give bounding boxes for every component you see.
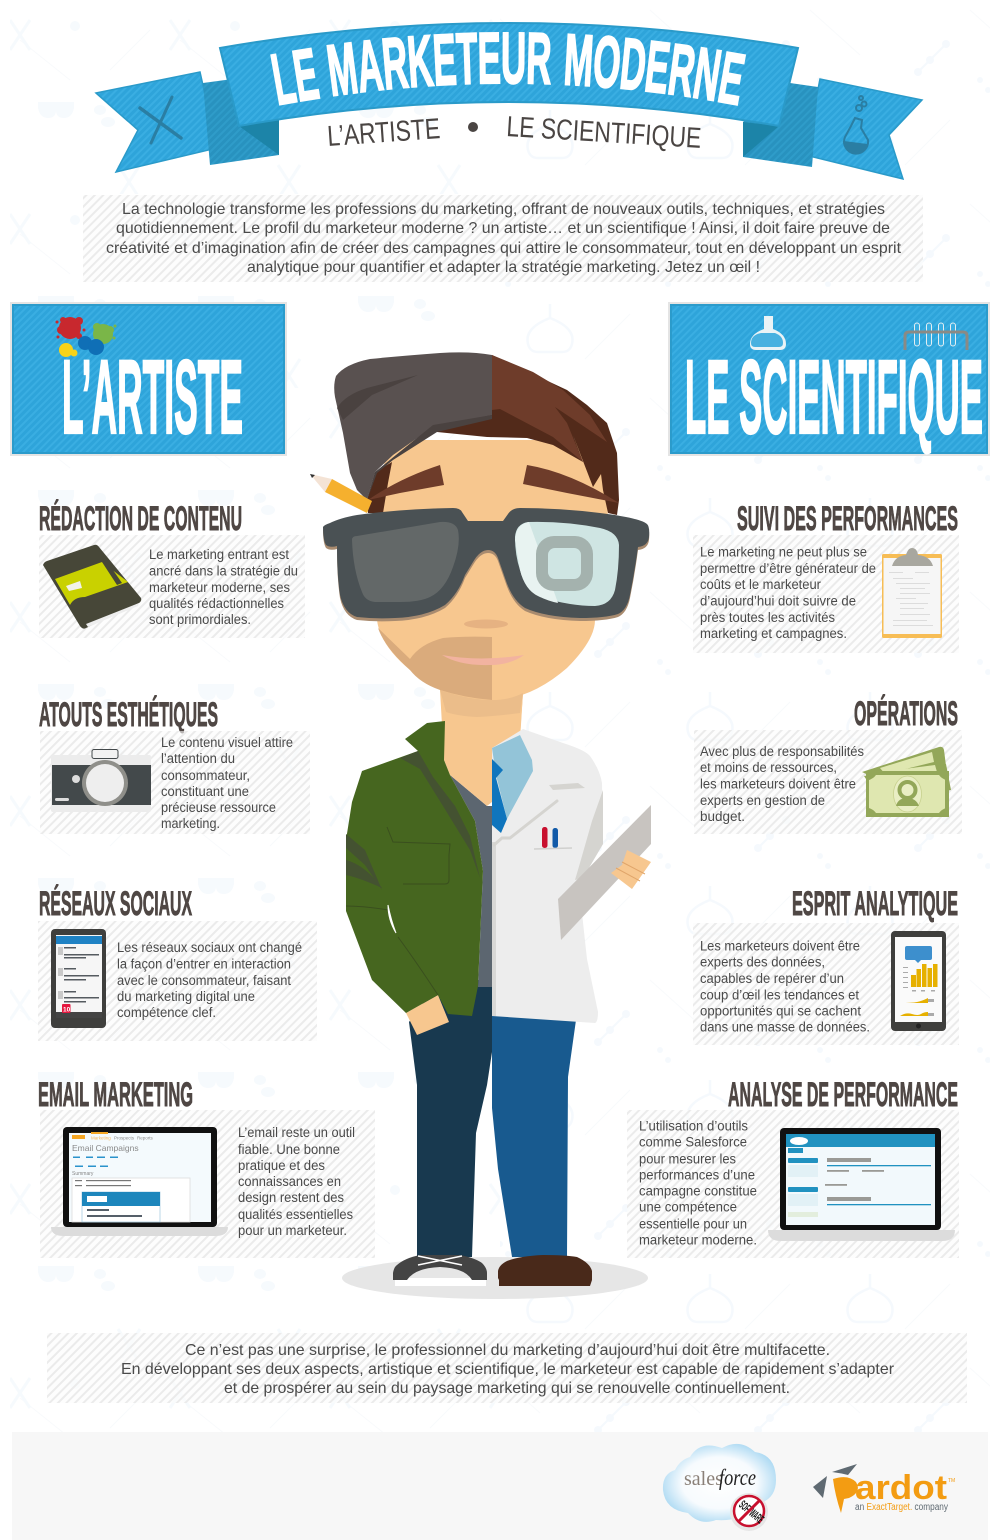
text: L’utilisation d’outils bbox=[639, 1118, 748, 1134]
text bbox=[149, 547, 298, 627]
pens in pocket bbox=[542, 827, 548, 848]
text: campagne constitue bbox=[639, 1184, 757, 1198]
text: l’attention du bbox=[161, 751, 235, 766]
text: marketeur moderne. bbox=[639, 1232, 757, 1248]
text bbox=[161, 735, 293, 831]
panel: intro: créativité et d’imagination afin de créer des campagnes qui attire le consommateur, tout en développant un esprit bbox=[106, 240, 902, 257]
title: E bbox=[641, 26, 674, 110]
panel: conclusion: et de prospérer au sein du paysage marketing qui se renouvelle continuellement. bbox=[224, 1380, 790, 1397]
ribbon main arc bbox=[220, 23, 798, 126]
text bbox=[700, 744, 864, 824]
text bbox=[700, 544, 876, 641]
panel: intro bbox=[83, 195, 923, 282]
text bbox=[117, 940, 302, 1020]
text: essentielle pour un bbox=[639, 1216, 747, 1232]
text: budget. bbox=[700, 809, 745, 824]
text: Le contenu visuel attire bbox=[161, 735, 293, 750]
footer band bbox=[12, 1432, 988, 1540]
text: sont primordiales. bbox=[149, 612, 251, 627]
text: coûts et le marketeur bbox=[700, 577, 821, 592]
text: experts des données, bbox=[700, 954, 825, 970]
text: comme Salesforce bbox=[639, 1134, 747, 1150]
neck bbox=[440, 690, 523, 806]
icon: laptop email campaigns: Reports bbox=[137, 1136, 154, 1140]
logo: pardot: ardot bbox=[855, 1469, 947, 1507]
icon: laptop email campaigns bbox=[51, 1127, 228, 1236]
text: fiable. Une bonne bbox=[238, 1142, 340, 1157]
hair bbox=[334, 352, 619, 515]
section: suivi des performances bbox=[693, 500, 959, 653]
ribbon left fold bbox=[203, 78, 279, 165]
icon: phone: 10 bbox=[63, 1006, 71, 1014]
title: R bbox=[664, 29, 700, 113]
text: capables de repérer d’un bbox=[700, 971, 844, 986]
icon: laptop email campaigns: Email Campaigns bbox=[72, 1143, 139, 1153]
panel: l'artiste header bbox=[11, 303, 286, 456]
ribbon right tail bbox=[805, 79, 922, 179]
text: experts en gestion de bbox=[700, 793, 825, 808]
text: qualités rédactionnelles bbox=[149, 596, 284, 611]
title: E bbox=[477, 18, 501, 100]
panel: le scientifique header bbox=[669, 303, 989, 456]
icon: banknotes bbox=[862, 747, 951, 817]
text: Les réseaux sociaux ont changé bbox=[117, 940, 302, 955]
text: marketeur moderne, ses bbox=[149, 580, 290, 595]
panel: conclusion bbox=[47, 1333, 967, 1403]
icon: paint splats bbox=[56, 317, 116, 357]
text: Avec plus de responsabilités bbox=[700, 744, 864, 759]
text: Le marketing entrant est bbox=[149, 547, 289, 562]
green jacket bbox=[346, 721, 483, 1016]
title: A bbox=[353, 25, 387, 109]
text: opportunités qui se cachent bbox=[700, 1004, 861, 1018]
text: connaissances en bbox=[238, 1174, 341, 1189]
text: L’email reste un outil bbox=[238, 1125, 355, 1140]
text: coup d’œil les tendances et bbox=[700, 988, 859, 1002]
ground shadow bbox=[342, 1257, 648, 1299]
text: pour mesurer les bbox=[639, 1152, 736, 1166]
title: L bbox=[266, 37, 301, 121]
t-shirt bbox=[450, 775, 492, 987]
right lens bbox=[515, 522, 619, 606]
text: pratique et des bbox=[238, 1158, 325, 1173]
text: constituant une bbox=[161, 784, 249, 799]
pencil bbox=[310, 474, 372, 513]
subtitle: L’ARTISTE bbox=[326, 113, 441, 153]
text: précieuse ressource bbox=[161, 800, 276, 815]
section: réseaux sociaux bbox=[38, 885, 317, 1041]
lab coat bbox=[492, 729, 603, 1023]
shirt collar bbox=[492, 735, 533, 819]
section: atouts esthétiques bbox=[39, 696, 310, 834]
text: du marketing digital une bbox=[117, 989, 255, 1004]
panel: conclusion: En développant ses deux aspects, artistique et scientifique, le marketeur est capable de rapidement s’adapter bbox=[121, 1361, 895, 1378]
banner: title ribbon bbox=[96, 18, 922, 179]
hand in pocket bbox=[406, 995, 449, 1035]
text: compétence clef. bbox=[117, 1005, 216, 1020]
illustration: marketer half artist half scientist bbox=[310, 352, 651, 1299]
icon: laptop email campaigns: Summary bbox=[72, 1171, 94, 1177]
text: consommateur, bbox=[161, 768, 250, 783]
text: marketing. bbox=[161, 816, 220, 831]
title: O bbox=[590, 21, 624, 104]
text bbox=[639, 1118, 757, 1248]
panel: intro: analytique pour quantifier et adapter la stratégie marketing. Jetez un œil ! bbox=[247, 259, 760, 276]
title: U bbox=[501, 18, 526, 100]
section: opérations bbox=[694, 695, 962, 834]
text: les marketeurs doivent être bbox=[700, 776, 856, 792]
logo: salesforce cloud bbox=[663, 1444, 776, 1531]
text: et moins de ressources, bbox=[700, 760, 837, 775]
section: réseaux sociaux: RÉSEAUX SOCIAUX bbox=[39, 885, 192, 923]
text: permettre d’être générateur de bbox=[700, 561, 876, 576]
icon: flask bbox=[750, 316, 786, 350]
text: dans une masse de données. bbox=[700, 1020, 870, 1034]
subtitle: LE SCIENTIFIQUE bbox=[506, 111, 702, 155]
title: M bbox=[562, 19, 596, 102]
title: D bbox=[617, 23, 650, 107]
title: T bbox=[455, 18, 479, 101]
trousers left bbox=[409, 980, 492, 1257]
icon: laptop dashboard bbox=[768, 1128, 955, 1241]
section: rédaction de contenu: RÉDACTION DE CONTENU bbox=[39, 500, 242, 538]
text: ancré dans la stratégie du bbox=[149, 564, 298, 578]
text: une compétence bbox=[639, 1200, 737, 1214]
magnified eye bbox=[536, 536, 593, 591]
icon: notebook bbox=[43, 545, 141, 629]
icon: test tube rack bbox=[905, 323, 967, 350]
icon: flask with bubbles bbox=[844, 96, 868, 154]
hand on clipboard bbox=[611, 850, 651, 889]
eyebrows bbox=[368, 465, 619, 503]
title: E bbox=[713, 37, 750, 121]
text: Le marketing ne peut plus se bbox=[700, 544, 867, 560]
icon: laptop email campaigns: Marketing bbox=[91, 1136, 111, 1140]
title: R bbox=[379, 22, 411, 106]
section: email marketing bbox=[38, 1076, 375, 1258]
trousers right bbox=[492, 1012, 576, 1257]
shoe right bbox=[498, 1255, 592, 1286]
glasses bbox=[323, 508, 649, 621]
text: qualités essentielles bbox=[238, 1207, 353, 1222]
panel: intro: quotidiennement. Le profil du marketeur moderne ? un artiste… et un scientifique ! Ainsi, il doit faire preuve de bbox=[116, 220, 890, 237]
text: d’aujourd’hui doit suivre de bbox=[700, 594, 856, 608]
clipboard bbox=[558, 805, 651, 940]
tie bbox=[492, 759, 507, 833]
section: email marketing: EMAIL MARKETING bbox=[38, 1076, 193, 1114]
section: esprit analytique bbox=[693, 885, 959, 1045]
face bbox=[377, 440, 608, 717]
text: près toutes les activités bbox=[700, 610, 835, 625]
logo: pardot: TM bbox=[948, 1478, 955, 1484]
title: E bbox=[431, 19, 458, 102]
icon: pencil and brush bbox=[140, 97, 181, 143]
ribbon left tail bbox=[96, 72, 217, 172]
left lens bbox=[352, 522, 459, 602]
shoe left bbox=[393, 1255, 487, 1286]
subtitle bbox=[326, 111, 702, 155]
title: E bbox=[288, 33, 324, 118]
logo: salesforce cloud: force bbox=[719, 1465, 756, 1490]
text: performances d’une bbox=[639, 1168, 755, 1182]
text: marketing et campagnes. bbox=[700, 626, 847, 641]
text: la façon d’entrer en interaction bbox=[117, 956, 291, 972]
section: analyse de performance bbox=[627, 1076, 959, 1258]
logo: pardot bbox=[813, 1464, 955, 1513]
text bbox=[700, 938, 870, 1034]
section: atouts esthétiques: ATOUTS ESTHÉTIQUES bbox=[39, 696, 218, 734]
icon: camera bbox=[51, 750, 151, 812]
icon: laptop email campaigns: Prospects bbox=[114, 1136, 135, 1140]
icon: phone bbox=[51, 929, 106, 1028]
text bbox=[238, 1125, 355, 1238]
title: N bbox=[688, 33, 726, 117]
title: K bbox=[405, 20, 436, 104]
text: pour un marketeur. bbox=[238, 1223, 347, 1238]
title: M bbox=[323, 28, 362, 112]
text: Les marketeurs doivent être bbox=[700, 938, 860, 954]
panel: intro: La technologie transforme les professions du marketing, offrant de nouveaux outils, techniques, et stratégies bbox=[122, 201, 885, 218]
section: rédaction de contenu bbox=[39, 500, 305, 638]
text: avec le consommateur, faisant bbox=[117, 973, 291, 988]
title: R bbox=[525, 18, 552, 100]
text: L’ARTISTE bbox=[62, 339, 243, 456]
ribbon right fold bbox=[743, 83, 818, 167]
text: design restent des bbox=[238, 1190, 344, 1205]
icon: tablet with charts bbox=[891, 931, 946, 1031]
title bbox=[266, 18, 750, 121]
logo: salesforce cloud: sales bbox=[684, 1468, 723, 1490]
icon: clipboard bbox=[882, 548, 942, 638]
panel: conclusion: Ce n’est pas une surprise, le professionnel du marketing d’aujourd’hui doit être multifacette. bbox=[185, 1342, 830, 1359]
badge bbox=[62, 1004, 70, 1013]
logo: pardot: an ExactTarget. company bbox=[855, 1502, 948, 1513]
